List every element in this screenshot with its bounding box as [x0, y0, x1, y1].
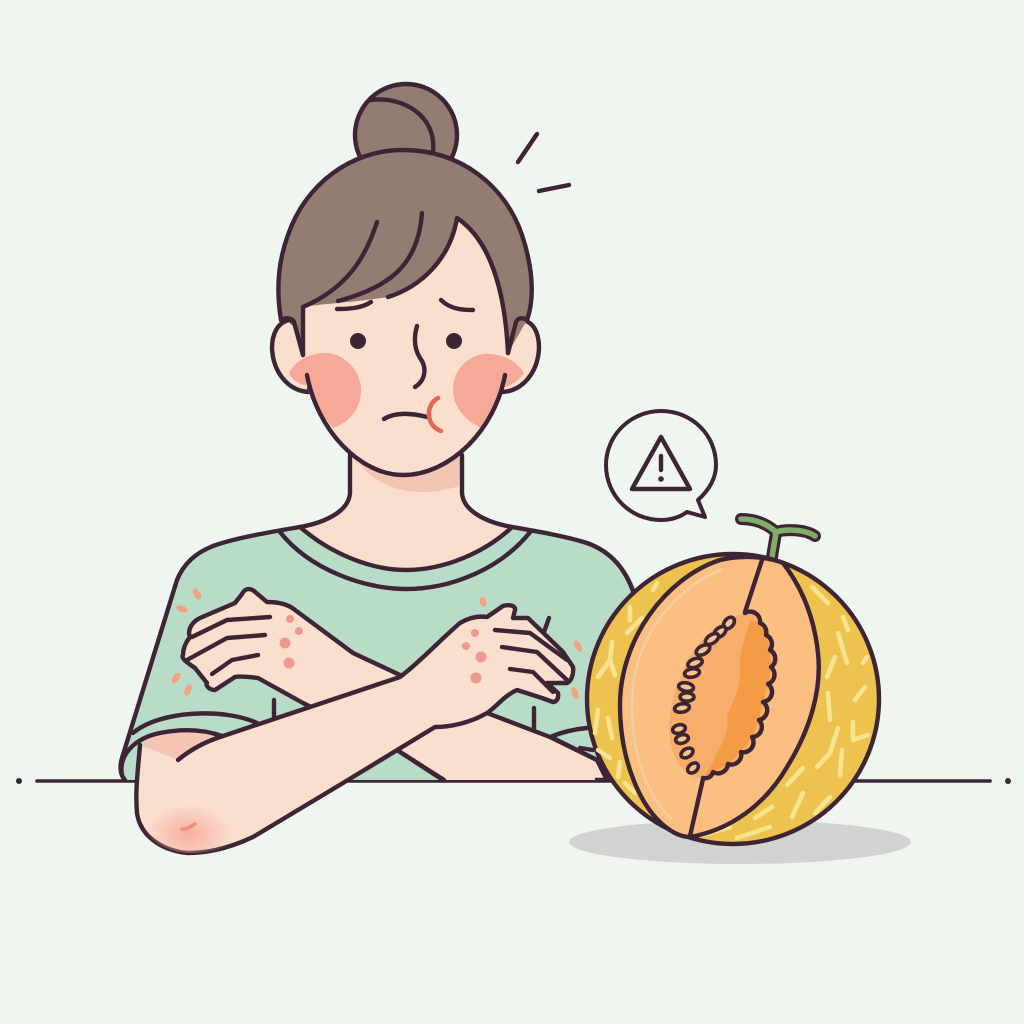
back arm and hand: [183, 589, 607, 780]
warning triangle: [632, 437, 690, 489]
neck: [300, 450, 512, 570]
surprise marks: [518, 134, 569, 191]
figure: woman with crossed arms: [121, 84, 640, 864]
face features: [307, 300, 505, 475]
warning speech bubble: [606, 411, 716, 520]
hair bun: [355, 84, 457, 186]
front arm and hand: [136, 605, 573, 864]
rash spots: [280, 615, 486, 684]
cheeks: [289, 353, 524, 428]
melon pulp: [703, 620, 771, 778]
melon stem: [741, 519, 815, 558]
table line: [16, 778, 1011, 784]
shirt: [121, 527, 640, 780]
hair back and face: [278, 150, 532, 475]
melon rind: [587, 554, 879, 844]
sleeves: [121, 700, 593, 775]
melon centre line: [690, 560, 762, 836]
melon flesh highlight: [632, 569, 722, 820]
shirt collar: [280, 527, 531, 589]
melon: [587, 519, 879, 844]
melon cut face: [620, 557, 819, 837]
ears: [272, 320, 539, 392]
seed cavity: [669, 612, 775, 778]
elbow redness: [146, 809, 226, 853]
scratch marks: [170, 587, 584, 700]
rind netting: [595, 583, 868, 838]
melon scalloped edge: [703, 612, 775, 778]
melon shadow: [569, 820, 911, 864]
melon seeds: [672, 615, 737, 775]
